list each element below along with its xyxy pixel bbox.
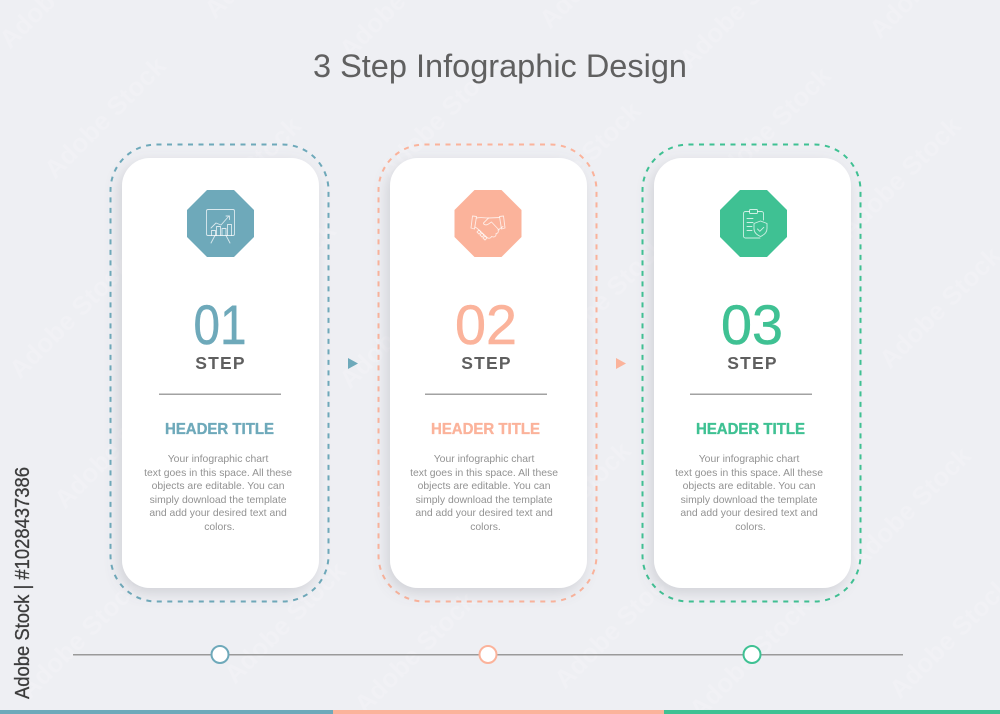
header title: HEADER TITLE (165, 421, 274, 438)
body text: text goes in this space. All these (675, 468, 823, 479)
divider (425, 394, 547, 395)
panel: step 1 (110, 144, 328, 602)
number: 02: 02 (455, 293, 517, 356)
header title: HEADER TITLE (696, 421, 805, 438)
timeline marker 3 (744, 646, 760, 663)
dashed outline: step 3 (642, 144, 860, 602)
watermark pattern: Adobe Stock (173, 425, 307, 559)
bottom colour bar (0, 710, 1000, 714)
card: step 3 (654, 158, 851, 588)
panel: step 3 (642, 144, 860, 602)
timeline marker 1 (212, 646, 228, 663)
body text: Your infographic chart (699, 454, 800, 465)
title: 3 Step Infographic Design (313, 48, 687, 84)
stock credit: Adobe Stock | #1028437386 (11, 467, 34, 699)
watermark pattern: Adobe Stock (3, 250, 137, 384)
timeline marker 2 (480, 646, 496, 663)
watermark pattern: Adobe Stock (713, 400, 847, 534)
body text: colors. (204, 522, 235, 533)
watermark pattern: Adobe Stock (548, 560, 682, 694)
card: step 1 (122, 158, 319, 588)
icon: clipboard with shield (720, 190, 787, 257)
watermark pattern: Adobe Stock (208, 215, 342, 349)
arrow: step 2 to 3 (616, 358, 626, 369)
header title: HEADER TITLE (431, 421, 540, 438)
icon: handshake (454, 190, 522, 257)
body text: objects are editable. You can (152, 481, 285, 492)
watermark pattern: Adobe Stock (218, 555, 352, 689)
divider (690, 394, 812, 395)
watermark pattern: Adobe Stock (833, 110, 967, 244)
body text: simply download the template (681, 495, 818, 506)
watermark pattern: Adobe Stock (373, 50, 507, 184)
body text: and add your desired text and (415, 508, 553, 519)
label: step: STEP (195, 353, 246, 373)
body text: simply download the template (150, 495, 287, 506)
label: step: STEP (461, 353, 512, 373)
card: step 2 (390, 158, 587, 588)
panel: step 2 (378, 144, 596, 602)
watermark pattern: Adobe Stock (703, 60, 837, 194)
body text: Your infographic chart (434, 454, 535, 465)
dashed outline: step 2 (378, 144, 596, 602)
body text: text goes in this space. All these (144, 468, 292, 479)
body text: colors. (735, 522, 766, 533)
body text: simply download the template (416, 495, 553, 506)
watermark pattern: Adobe Stock (38, 50, 172, 184)
watermark pattern: Adobe Stock (513, 95, 647, 229)
divider (159, 394, 281, 395)
watermark pattern: Adobe Stock (173, 110, 307, 244)
body text: and add your desired text and (680, 508, 818, 519)
watermark pattern: Adobe Stock (13, 570, 147, 704)
icon: presentation chart (187, 190, 254, 257)
watermark pattern: Adobe Stock (378, 395, 512, 529)
watermark pattern: Adobe Stock (843, 440, 977, 574)
number: 01: 01 (194, 293, 246, 356)
watermark pattern: Adobe Stock (48, 380, 182, 514)
arrow: step 1 to 2 (348, 358, 358, 369)
watermark pattern: Adobe Stock (503, 435, 637, 569)
body text: colors. (470, 522, 501, 533)
body text: Your infographic chart (168, 454, 269, 465)
watermark pattern: Adobe Stock (538, 230, 672, 364)
body text: and add your desired text and (149, 508, 287, 519)
label: step: STEP (727, 353, 778, 373)
timeline (73, 646, 903, 663)
watermark pattern: Adobe Stock (333, 260, 467, 394)
number: 03: 03 (721, 293, 783, 356)
body text: text goes in this space. All these (410, 468, 558, 479)
dashed outline: step 1 (110, 144, 328, 602)
body text: objects are editable. You can (418, 481, 551, 492)
watermark pattern: Adobe Stock (668, 270, 802, 404)
body text: objects are editable. You can (683, 481, 816, 492)
